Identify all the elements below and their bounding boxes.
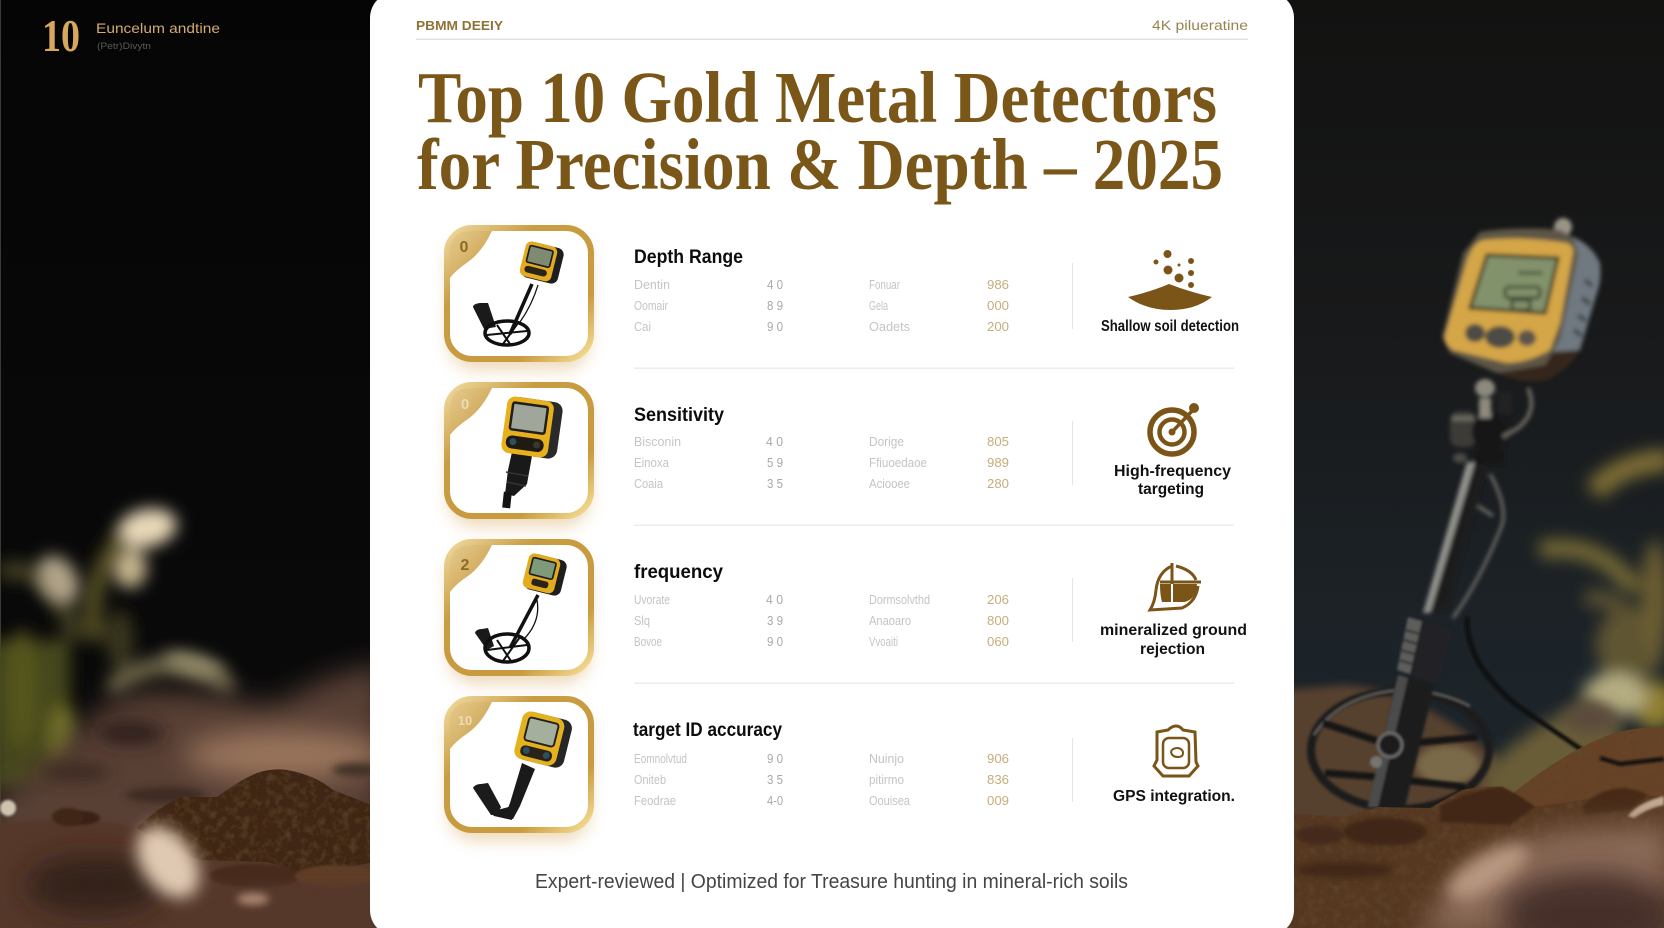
- icon caption: High-frequency: [1114, 463, 1231, 480]
- spec table: 906: [987, 752, 1009, 766]
- row 3: frequency: [447, 542, 1247, 684]
- spec table: Coaia: [634, 477, 663, 491]
- spec table: Cai: [634, 320, 651, 334]
- spec table: 3 5: [767, 773, 783, 787]
- blurred far soil: [1285, 685, 1500, 928]
- icon frame: detector 1: [447, 228, 591, 370]
- upper shaft: [1423, 462, 1487, 613]
- badge: top-left edition mark: 10: [42, 10, 80, 61]
- spec table: 4 0: [767, 278, 783, 292]
- detector in scene: [1311, 218, 1664, 809]
- spec table: 280: [987, 477, 1009, 491]
- spec table: Gela: [869, 299, 888, 313]
- icon: soil particles: [1128, 250, 1212, 310]
- icon caption: mineralized ground: [1100, 622, 1247, 639]
- blurred plant: [1540, 460, 1664, 729]
- lower shaft: [1368, 673, 1435, 807]
- title: Top 10 Gold Metal Detectors: [418, 57, 1217, 138]
- spec table: Oniteb: [634, 773, 666, 787]
- row 1: depth range: [447, 228, 1239, 370]
- spec table: Fonuar: [869, 278, 900, 292]
- spec table: Bovoe: [634, 635, 662, 649]
- spec table: Oouisea: [869, 794, 910, 808]
- spec table: 989: [987, 456, 1009, 470]
- spec table: 060: [987, 635, 1009, 649]
- icon caption: [1114, 463, 1231, 498]
- spec table: Ffiuoedaoe: [869, 456, 927, 470]
- icon caption: GPS integration.: [1113, 788, 1235, 805]
- spec table: 4-0: [767, 794, 783, 808]
- spec table: Feodrae: [634, 794, 676, 808]
- spec table: Dentin: [634, 278, 670, 292]
- spec table: Nuinjo: [869, 752, 904, 766]
- spec table: Oomair: [634, 299, 668, 313]
- badge: top-left edition mark: [42, 10, 220, 61]
- spec table: 800: [987, 614, 1009, 628]
- spec table: 9 0: [767, 320, 783, 334]
- icon caption: rejection: [1140, 641, 1205, 658]
- title: for Precision & Depth – 2025: [417, 124, 1223, 205]
- heading: frequency: [634, 562, 723, 583]
- spec table: 206: [987, 593, 1009, 607]
- badge: top-left edition mark: Euncelum andtine: [96, 20, 220, 36]
- spec table: Aciooee: [869, 477, 910, 491]
- background: left soil scene: [0, 0, 385, 928]
- spec table: Bisconin: [634, 435, 681, 449]
- spec table: Vvoaiti: [869, 635, 898, 649]
- spec table: Uvorate: [634, 593, 670, 607]
- icon frame: detector 3: [447, 542, 591, 684]
- icon frame: detector 4: [447, 699, 591, 841]
- spec table: Dormsolvthd: [869, 593, 930, 607]
- heading: target ID accuracy: [633, 720, 782, 741]
- spec table: 4 0: [766, 435, 783, 449]
- spec table: 3 9: [767, 614, 783, 628]
- header strip: 4K pilueratine: [1152, 18, 1248, 33]
- header strip: PBMM DEEIY: [416, 18, 503, 33]
- icon: target: [1150, 403, 1199, 454]
- background: right detector scene: [1285, 0, 1664, 928]
- spec table: [634, 435, 1009, 491]
- spec table: 000: [987, 299, 1009, 313]
- heading: Depth Range: [634, 247, 743, 268]
- spec table: 4 0: [766, 593, 783, 607]
- row 2: sensitivity: [447, 385, 1231, 527]
- spec table: 009: [987, 794, 1009, 808]
- spec table: Dorige: [869, 435, 904, 449]
- icon: ground rejection shield: [1150, 563, 1201, 610]
- spec table: 986: [987, 278, 1009, 292]
- spec table: [634, 752, 1009, 808]
- spec table: [634, 278, 1009, 334]
- footer note: Expert-reviewed | Optimized for Treasure hunting in mineral-rich soils: [535, 871, 1128, 893]
- handle cylinder: [1397, 617, 1453, 683]
- spec table: Anaoaro: [869, 614, 911, 628]
- icon: GPS badge: [1154, 726, 1198, 776]
- spec table: 8 9: [767, 299, 783, 313]
- spec table: Slq: [634, 614, 650, 628]
- spec table: 9 0: [767, 635, 783, 649]
- header strip: [416, 18, 1248, 40]
- foreground soil: [1505, 727, 1664, 830]
- spec table: 3 5: [767, 477, 783, 491]
- icon frame: detector 2: 0: [461, 396, 469, 413]
- clamp: [1450, 411, 1476, 447]
- spec table: [634, 593, 1009, 649]
- icon frame: detector 4: 10: [458, 713, 472, 728]
- icon frame: detector 2: [447, 385, 591, 527]
- icon frame: detector 3: 2: [461, 557, 470, 574]
- spec table: Eomnolvtud: [634, 752, 687, 766]
- spec table: 5 9: [767, 456, 783, 470]
- panel: white main card: [370, 0, 1294, 928]
- spec table: Einoxa: [634, 456, 669, 470]
- spec table: Oadets: [869, 320, 910, 334]
- title: [417, 57, 1223, 205]
- icon caption: Shallow soil detection: [1101, 318, 1239, 335]
- icon caption: targeting: [1138, 481, 1204, 498]
- head: [1442, 218, 1601, 381]
- badge: top-left edition mark: (Petr)Divytn: [97, 41, 151, 51]
- spec table: 9 0: [767, 752, 783, 766]
- spec table: 805: [987, 435, 1009, 449]
- spec table: 200: [987, 320, 1009, 334]
- row 4: target ID accuracy: [447, 699, 1235, 841]
- coil: [1311, 617, 1489, 809]
- spec table: 836: [987, 773, 1009, 787]
- cable: [1467, 617, 1664, 763]
- heading: Sensitivity: [634, 405, 724, 426]
- icon caption: [1100, 622, 1247, 658]
- icon frame: detector 1: 0: [460, 239, 469, 256]
- spec table: pitirmo: [869, 773, 904, 787]
